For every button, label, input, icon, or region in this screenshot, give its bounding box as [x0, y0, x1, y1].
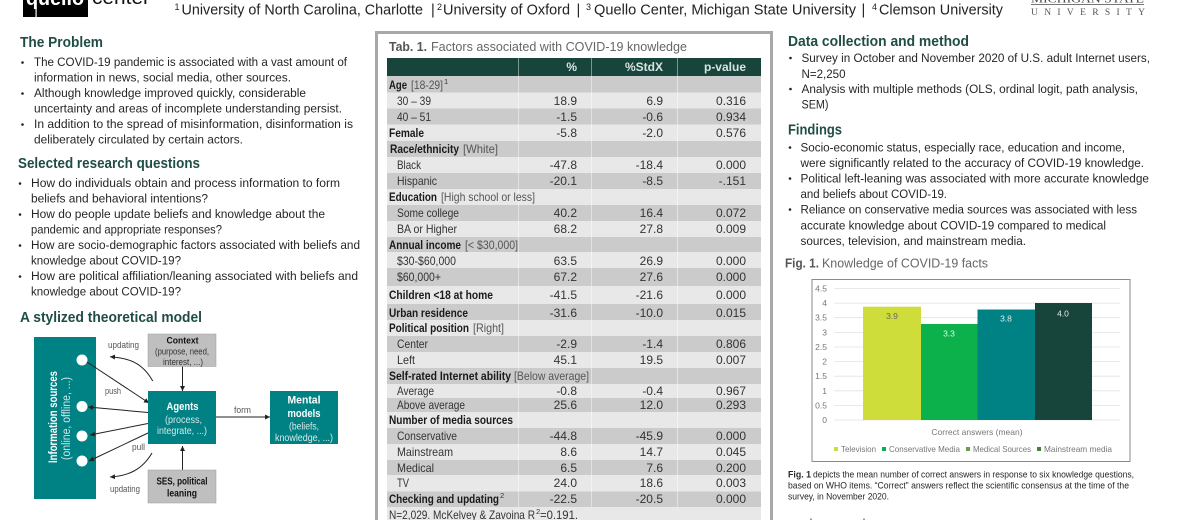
bar: television 3.9 [863, 307, 921, 420]
text block: problem bullets: uncertainty and areas of incomplete understanding persist. [34, 102, 342, 116]
table values: -18.4 [636, 158, 663, 172]
box: context [148, 334, 216, 367]
table values: 14.7 [640, 445, 663, 459]
table values: -20.1 [550, 174, 577, 188]
text block: data collection bullets: N=2,250 [802, 67, 846, 81]
table values: -47.8 [550, 158, 577, 172]
text block: research questions [19, 176, 360, 298]
table values: 8.6 [560, 445, 577, 459]
table values: 40.2 [554, 206, 577, 220]
bar: medical sources 3.8 [978, 310, 1035, 420]
bar: conservative media 3.3 [921, 324, 978, 420]
table values: 0.000 [716, 288, 746, 302]
table row labels [389, 77, 589, 506]
table row labels: Annual income [389, 238, 461, 252]
author affiliations: | [862, 2, 865, 18]
table row labels: Left [397, 353, 416, 367]
diagram: theoretical model [34, 334, 338, 503]
table row labels: Some college [397, 206, 459, 220]
table header row: p-value [704, 60, 746, 74]
arrow labels: form [234, 405, 251, 415]
box: mental models: models [288, 408, 320, 420]
heading: The Problem: The Problem [20, 35, 103, 51]
bar: mainstream media 4.0 [1035, 303, 1092, 420]
arrow labels: push [105, 386, 121, 396]
author affiliations: | [431, 2, 435, 18]
author affiliations: | [576, 2, 580, 18]
table values: 0.000 [716, 270, 746, 284]
table values: 26.9 [640, 254, 663, 268]
bar: television 3.9: 3.9 [886, 311, 898, 321]
table values: -31.6 [550, 306, 577, 320]
y axis labels: 0.5 [815, 400, 827, 410]
table row labels: Center [397, 337, 428, 351]
figure caption [788, 470, 1134, 502]
text block: problem bullets: information in news, social media, other sources. [34, 71, 291, 85]
table values: -41.5 [550, 288, 577, 302]
box: context: Context [166, 336, 199, 346]
bar: conservative media 3.3: 3.3 [943, 328, 955, 338]
table row labels: [White] [463, 142, 498, 156]
table values: -2.0 [642, 126, 663, 140]
table values: -0.8 [556, 384, 577, 398]
table values: -2.9 [556, 337, 577, 351]
table values: -1.5 [556, 110, 577, 124]
box: information sources: Information sources [48, 371, 60, 463]
y axis labels [815, 284, 827, 425]
table values: 0.003 [716, 476, 746, 490]
table row labels: Female [389, 126, 424, 140]
legend: Television [841, 444, 876, 454]
table values [550, 94, 746, 506]
table row labels: Age [389, 78, 407, 92]
table values: -8.5 [642, 174, 663, 188]
y axis labels: 1 [822, 386, 827, 396]
table row labels: $30-$60,000 [397, 254, 456, 268]
heading: Findings: Findings [788, 122, 842, 138]
text block: data collection bullets [789, 51, 1150, 112]
text block: research questions: How are political affiliation/leaning associated with beliefs and [31, 269, 358, 283]
table row labels: Conservative [397, 429, 457, 443]
table values: 68.2 [554, 222, 577, 236]
table values: 7.6 [646, 461, 663, 475]
table row labels: Mainstream [397, 445, 453, 459]
box: agents: (process, [165, 415, 202, 426]
y axis labels: 0 [822, 415, 827, 425]
box: agents: Agents [166, 401, 198, 413]
text block: research questions: knowledge about COVID-19? [31, 284, 181, 298]
table row labels: [Below average] [514, 369, 589, 383]
heading: Selected research questions: Selected research questions [18, 156, 200, 172]
table values: 0.000 [716, 429, 746, 443]
text block: research questions: How do people update beliefs and knowledge about the [31, 207, 325, 221]
box: mental models: Mental [288, 394, 320, 406]
logo: Quello Center [23, 0, 150, 17]
text block: problem bullets: In addition to the spread of misinformation, disinformation is [34, 117, 353, 131]
author affiliations: 1 [174, 2, 180, 12]
text block: data collection bullets: Analysis with multiple methods (OLS, ordinal logit, path analysis, [802, 82, 1138, 96]
figure title: Knowledge of COVID-19 facts [822, 256, 988, 270]
table row labels: BA or Higher [397, 222, 457, 236]
logo: Michigan State University [1031, 0, 1145, 18]
y axis labels: 3 [822, 327, 827, 337]
legend: Conservative Media [889, 444, 960, 454]
table values: 45.1 [554, 353, 577, 367]
y axis labels: 3.5 [815, 313, 827, 323]
table header row: % [566, 60, 577, 74]
table row labels: Political position [389, 321, 469, 335]
table values: 0.967 [716, 384, 746, 398]
box: SES, political leaning: SES, political [156, 476, 208, 488]
y axis labels: 4 [822, 298, 827, 308]
table title: Factors associated with COVID-19 knowledge [431, 40, 687, 54]
table values: 0.200 [716, 461, 746, 475]
table row labels: Urban residence [389, 306, 468, 320]
text block: findings bullets [789, 141, 1149, 248]
bar: mainstream media 4.0: 4.0 [1057, 308, 1069, 318]
box: context: (purpose, need, [155, 346, 209, 356]
table values: 6.9 [646, 94, 663, 108]
arrows: push and pull [87, 357, 270, 477]
table row labels: 2 [500, 491, 504, 500]
table values: 0.576 [716, 126, 746, 140]
table values: 18.6 [640, 476, 663, 490]
box: mental models: (beliefs, [289, 422, 319, 432]
text block: problem bullets: deliberately circulated by certain actors. [34, 133, 243, 147]
bar chart: knowledge of COVID-19 facts [812, 280, 1130, 462]
table values: 6.5 [560, 461, 577, 475]
table values: 16.4 [640, 206, 663, 220]
table values: 0.806 [716, 337, 746, 351]
panel: table 1 [376, 32, 772, 520]
box: information sources [34, 337, 96, 499]
x axis label: Correct answers (mean) [931, 427, 1023, 437]
table row labels: Black [397, 158, 422, 172]
table row labels: Race/ethnicity [390, 142, 459, 156]
table values: 0.009 [716, 222, 746, 236]
figure caption: Fig. 1 [788, 470, 811, 480]
y axis labels: 2 [822, 357, 827, 367]
text block: findings bullets: accurate knowledge about COVID-19 compared to medical [800, 218, 1106, 232]
box: information sources: (online, offline, ...) [61, 377, 73, 460]
text block: findings bullets: Socio-economic status, especially race, education and income, [800, 141, 1125, 155]
table values: 24.0 [554, 476, 577, 490]
table header row [387, 58, 761, 76]
table values: 0.045 [716, 445, 746, 459]
box: agents [148, 391, 216, 444]
text block: problem bullets [21, 55, 353, 147]
table values: 0.072 [716, 206, 746, 220]
author affiliations: 2 [437, 2, 442, 12]
table values: -0.6 [642, 110, 663, 124]
table values: -5.8 [556, 126, 577, 140]
box: mental models: knowledge, ...) [275, 433, 333, 444]
logo: Michigan State University: UNIVERSITY [1031, 8, 1145, 18]
table row backgrounds [387, 58, 761, 520]
text block: data collection bullets: Survey in October and November 2020 of U.S. adult Internet users, [802, 51, 1150, 65]
table row labels: Education [389, 190, 437, 204]
text block: findings bullets: were significantly related to the accuracy of COVID-19 knowledge. [800, 156, 1144, 170]
box: context: interest, ...) [163, 357, 203, 367]
figure title: Fig. 1. [785, 256, 819, 270]
table row labels: 40 – 51 [397, 110, 431, 124]
y axis labels: 4.5 [815, 284, 827, 294]
table values: 25.6 [554, 398, 577, 412]
author affiliations [174, 2, 1004, 18]
table row labels: 30 – 39 [397, 94, 431, 108]
text block: findings bullets: Reliance on conservative media sources was associated with less [800, 203, 1137, 217]
text block: findings bullets: sources, television, and mainstream media. [800, 234, 1026, 248]
text block: data collection bullets: SEM) [802, 98, 828, 112]
arrow labels [105, 340, 251, 494]
table values: 67.2 [554, 270, 577, 284]
table values: 12.0 [640, 398, 663, 412]
table values: 27.8 [640, 222, 663, 236]
table row labels: 1 [444, 77, 448, 86]
table row labels: Self-rated Internet ability [389, 369, 511, 383]
text block: research questions: beliefs and behavioral intentions? [31, 192, 208, 206]
table row labels: [< $30,000] [465, 238, 518, 252]
table values: -22.5 [550, 492, 577, 506]
author affiliations: University of North Carolina, Charlotte [182, 2, 423, 18]
table values: 0.000 [716, 254, 746, 268]
text block: research questions: knowledge about COVID-19? [31, 254, 181, 268]
text block: findings bullets: Political left-leaning was associated with more accurate knowledge [800, 172, 1149, 186]
table values: -21.6 [636, 288, 663, 302]
table values: -.151 [719, 174, 746, 188]
author affiliations: 4 [872, 2, 877, 12]
table values: -20.5 [636, 492, 663, 506]
table row labels: Checking and updating [389, 492, 499, 506]
text block: problem bullets: Although knowledge improved quickly, considerable [34, 86, 306, 100]
box: agents: integrate, ...) [157, 426, 207, 437]
table values: 19.5 [640, 353, 663, 367]
author affiliations: University of Oxford [443, 2, 570, 18]
table row labels: Number of media sources [389, 413, 513, 427]
figure caption: based on WHO items. “Correct” answers reflect the scientific consensus at the time of the [788, 481, 1129, 491]
table values: -1.4 [642, 337, 663, 351]
table values: 0.007 [716, 353, 746, 367]
table values: -45.9 [636, 429, 663, 443]
arrow labels: updating [108, 340, 139, 350]
table note: 2 [536, 507, 540, 516]
table header row: %StdX [625, 60, 663, 74]
table values: 0.293 [716, 398, 746, 412]
box: SES, political leaning: leaning [167, 488, 197, 500]
text block: findings bullets: and beliefs about COVID-19. [800, 187, 947, 201]
author affiliations: Clemson University [879, 2, 1004, 18]
table values: 63.5 [554, 254, 577, 268]
table row labels: TV [397, 476, 409, 490]
author affiliations: 3 [586, 2, 591, 12]
table values: 0.000 [716, 158, 746, 172]
legend: Mainstream media [1044, 444, 1112, 454]
table values: -10.0 [636, 306, 663, 320]
text block: problem bullets: The COVID-19 pandemic is associated with a vast amount of [34, 55, 348, 69]
box: SES, political leaning [148, 470, 216, 503]
heading: A stylized theoretical model: A stylized theoretical model [20, 310, 202, 326]
heading: Data collection and method: Data collection and method [788, 34, 969, 50]
y axis labels: 2.5 [815, 342, 827, 352]
y axis labels: 1.5 [815, 371, 827, 381]
table row labels: [Right] [473, 321, 504, 335]
text block: research questions: How do individuals obtain and process information to form [31, 176, 340, 190]
figure caption: depicts the mean number of correct answers in response to six knowledge questions, [813, 470, 1134, 480]
bar: medical sources 3.8: 3.8 [1000, 314, 1012, 324]
table values: 0.934 [716, 110, 746, 124]
table values: 0.316 [716, 94, 746, 108]
table values: 18.9 [554, 94, 577, 108]
table values: 27.6 [640, 270, 663, 284]
table title: Tab. 1. [389, 40, 427, 54]
author affiliations: Quello Center, Michigan State University [594, 2, 857, 18]
arrow labels: pull [132, 442, 145, 452]
table values: 0.000 [716, 492, 746, 506]
text block: research questions: pandemic and appropriate responses? [31, 222, 222, 236]
table row labels: Average [397, 384, 434, 398]
box: mental models [270, 391, 338, 444]
table values: -44.8 [550, 429, 577, 443]
table row labels: $60,000+ [397, 270, 441, 284]
legend: Medical Sources [973, 444, 1031, 454]
arrow labels: updating [110, 484, 140, 494]
table row labels: [18-29] [411, 78, 443, 92]
table row labels: Above average [397, 398, 465, 412]
table row labels: Hispanic [397, 174, 437, 188]
text block: research questions: How are socio-demographic factors associated with beliefs and [31, 238, 360, 252]
figure caption: survey, in November 2020. [788, 492, 889, 502]
legend [834, 444, 1112, 454]
table values: 0.015 [716, 306, 746, 320]
table row labels: Children <18 at home [389, 288, 493, 302]
table row labels: Medical [397, 461, 434, 475]
table row labels: [High school or less] [441, 190, 535, 204]
table values: -0.4 [642, 384, 663, 398]
